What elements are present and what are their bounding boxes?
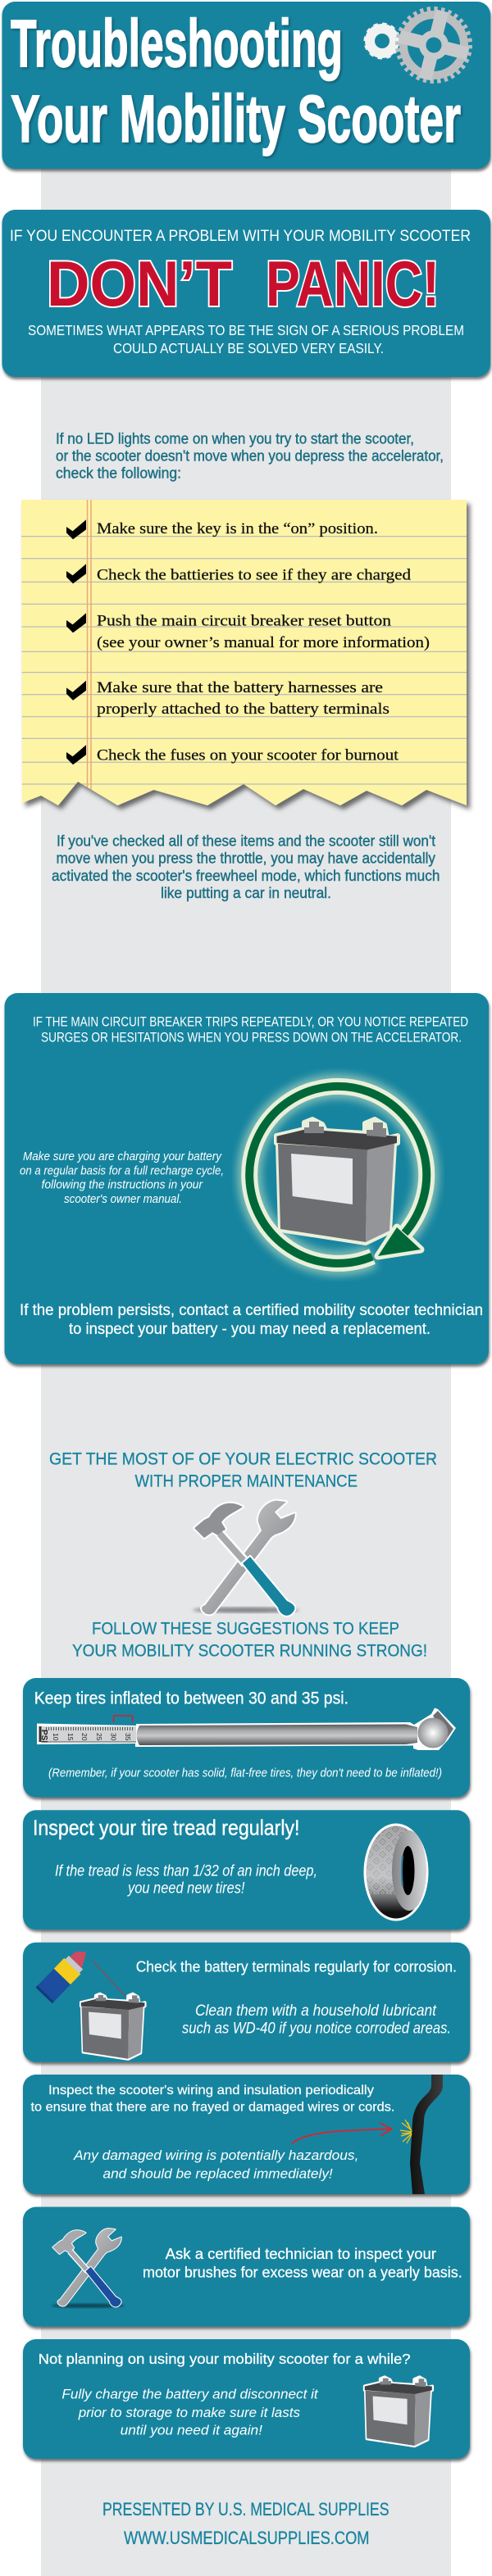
text block: tread depth: If the tread is less than 1/32 of an inch deep, xyxy=(55,1862,317,1880)
heading: follow these suggestions: YOUR MOBILITY SCOOTER RUNNING STRONG! xyxy=(72,1641,427,1661)
checklist text: Check the battieries to see if they are charged xyxy=(97,566,412,583)
headline: don't panic: DON’T xyxy=(47,247,232,320)
subtext: COULD ACTUALLY BE SOLVED VERY EASILY. xyxy=(113,340,384,356)
text block: charging advice: on a regular basis for a full recharge cycle, xyxy=(20,1164,224,1177)
text block: freewheel mode xyxy=(52,832,440,901)
text block: motor brushes: Ask a certified technician to inspect your xyxy=(166,2246,436,2262)
icon: gears xyxy=(367,2,476,88)
text block: tread depth: you need new tires! xyxy=(126,1880,245,1898)
icon: damaged wire xyxy=(400,2075,443,2194)
heading: follow these suggestions xyxy=(72,1619,427,1661)
icon: tire pressure gauge: 25 xyxy=(95,1733,103,1741)
heading: not planning: Not planning on using your mobility scooter for a while? xyxy=(39,2351,411,2367)
text block: hazard warning: and should be replaced immediately! xyxy=(103,2166,333,2181)
text block: hazard warning xyxy=(73,2147,358,2181)
icon: tire pressure gauge: PSI xyxy=(39,1730,48,1743)
heading: keep tires inflated: Keep tires inflated to between 30 and 35 psi. xyxy=(34,1689,348,1708)
footer: presented by xyxy=(102,2499,389,2548)
heading: circuit breaker xyxy=(33,1014,468,1045)
text block: charge and disconnect xyxy=(61,2386,319,2438)
checklist text: (see your owner’s manual for more information) xyxy=(97,634,430,651)
panel: tire pressure xyxy=(23,1678,470,1798)
icon: battery with recharge arrow xyxy=(249,1086,426,1263)
icon: tire xyxy=(365,1825,427,1920)
text block: motor brushes xyxy=(143,2246,462,2281)
panel: circuit breaker xyxy=(5,993,489,1364)
note: solid tires: (Remember, if your scooter has solid, flat-free tires, they don't need to be inflated!) xyxy=(48,1766,442,1780)
text block: freewheel mode: If you've checked all of these items and the scooter still won't xyxy=(57,832,435,850)
text block: inspect wiring: Inspect the scooter's wiring and insulation periodically xyxy=(48,2084,374,2098)
text block: contact technician: to inspect your battery - you may need a replacement. xyxy=(69,1320,430,1338)
title xyxy=(11,7,461,156)
arrow: points to frayed wire xyxy=(292,2123,392,2143)
checklist text: Make sure that the battery harnesses are xyxy=(97,679,383,696)
text block: lubricant: such as WD-40 if you notice corroded areas. xyxy=(182,2020,451,2038)
text block: motor brushes: motor brushes for excess wear on a yearly basis. xyxy=(143,2265,462,2281)
text block: contact technician: If the problem persists, contact a certified mobility scooter technician xyxy=(20,1301,483,1319)
icon: hammer and wrench xyxy=(193,1501,299,1616)
checklist text xyxy=(97,520,430,764)
panel: tire tread xyxy=(23,1810,470,1930)
heading: proper maintenance xyxy=(49,1449,437,1491)
text block: charge and disconnect: Fully charge the battery and disconnect it xyxy=(61,2386,319,2402)
text block: charging advice: scooter's owner manual. xyxy=(64,1193,182,1206)
text block: intro to checklist: If no LED lights come on when you try to start the scooter, xyxy=(56,431,414,447)
headline: don't panic: PANIC! xyxy=(266,247,440,320)
text block: tread depth xyxy=(55,1862,317,1898)
text block: hazard warning: Any damaged wiring is potentially hazardous, xyxy=(73,2147,358,2163)
panel: motor brushes xyxy=(23,2207,470,2327)
heading: check terminals: Check the battery terminals regularly for corrosion. xyxy=(136,1958,457,1975)
footer: presented by: WWW.USMEDICALSUPPLIES.COM xyxy=(124,2528,369,2548)
icon: tire pressure gauge: 30 xyxy=(110,1733,118,1741)
checklist text: Make sure the key is in the “on” position. xyxy=(97,520,378,537)
text block: intro to checklist xyxy=(56,431,444,482)
headline: don't panic xyxy=(47,247,440,320)
text block: charge and disconnect: prior to storage to make sure it lasts xyxy=(78,2405,300,2420)
icon: lubricant spray can xyxy=(36,1943,125,2003)
text block: charging advice xyxy=(20,1150,224,1206)
icon: battery xyxy=(80,1993,145,2059)
panel: storage xyxy=(23,2339,470,2459)
text block: intro to checklist: check the following: xyxy=(56,465,181,482)
panel: wiring xyxy=(23,2075,470,2194)
text block: freewheel mode: like putting a car in neutral. xyxy=(161,884,331,901)
footer: presented by: PRESENTED BY U.S. MEDICAL SUPPLIES xyxy=(102,2499,389,2519)
text block: inspect wiring: to ensure that there are no frayed or damaged wires or cords. xyxy=(31,2101,394,2114)
heading: follow these suggestions: FOLLOW THESE SUGGESTIONS TO KEEP xyxy=(92,1619,399,1639)
icon: tire pressure gauge: 15 xyxy=(66,1733,75,1741)
checklist text: Push the main circuit breaker reset button xyxy=(97,612,392,629)
text block: freewheel mode: move when you press the throttle, you may have accidentally xyxy=(56,850,436,867)
checklist text: properly attached to the battery terminals xyxy=(97,701,390,718)
icon: tire pressure gauge: 20 xyxy=(80,1733,89,1741)
checklist text: Check the fuses on your scooter for burnout xyxy=(97,746,399,764)
icon: hammer and wrench xyxy=(52,2229,124,2308)
gray background column xyxy=(41,164,451,2576)
panel: title header xyxy=(2,2,490,169)
heading: inspect tread: Inspect your tire tread regularly! xyxy=(33,1815,300,1839)
text block: inspect wiring xyxy=(31,2084,394,2114)
text block: charging advice: Make sure you are charging your battery xyxy=(23,1150,222,1163)
panel: don't panic xyxy=(2,210,490,377)
text block: charge and disconnect: until you need it again! xyxy=(121,2423,262,2438)
icon: check marks xyxy=(66,519,86,764)
icon: battery xyxy=(364,2377,432,2447)
icon: tire pressure gauge: 10 xyxy=(52,1733,60,1741)
icon: tire pressure gauge: 35 xyxy=(124,1733,132,1741)
text block: lubricant: Clean them with a household lubricant xyxy=(195,2002,437,2020)
subtext xyxy=(28,322,464,356)
text block: lubricant xyxy=(182,2002,451,2038)
heading: proper maintenance: GET THE MOST OF OF YOUR ELECTRIC SCOOTER xyxy=(49,1449,437,1469)
heading: proper maintenance: WITH PROPER MAINTENANCE xyxy=(134,1472,358,1491)
icon: tire pressure gauge xyxy=(37,1708,456,1750)
text block: intro to checklist: or the scooter doesn't move when you depress the accelerator, xyxy=(56,448,444,465)
text block: contact technician xyxy=(20,1301,483,1338)
panel: yellow notepad checklist xyxy=(21,500,467,805)
text block: charging advice: following the instructions in your xyxy=(41,1179,203,1192)
panel: battery terminals xyxy=(23,1943,470,2062)
text block: freewheel mode: activated the scooter's freewheel mode, which functions much xyxy=(52,867,440,884)
